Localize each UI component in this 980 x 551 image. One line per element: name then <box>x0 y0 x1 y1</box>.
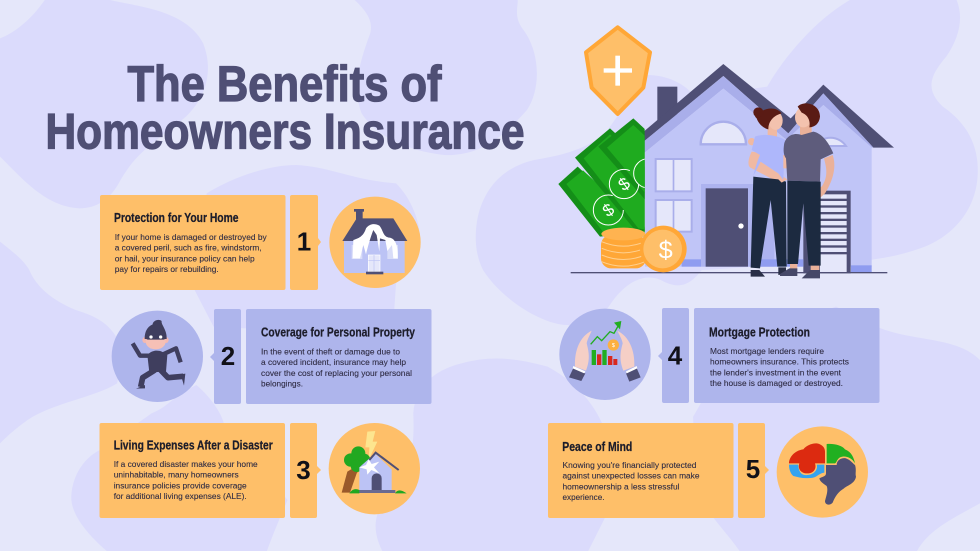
number tab <box>210 309 241 404</box>
panel: text <box>694 308 880 403</box>
body text: the house is damaged or destroyed. <box>710 378 843 388</box>
body text: pay for repairs or rebuilding. <box>115 264 219 274</box>
body text: homeowners insurance. This protects <box>710 357 849 367</box>
scene: shield and house <box>571 27 894 273</box>
title: Homeowners Insurance <box>46 104 524 160</box>
title <box>46 56 524 160</box>
card 3: living expenses after a disaster <box>100 423 420 518</box>
body text: experience. <box>562 492 604 502</box>
heading: Peace of Mind <box>562 440 632 454</box>
body text: a covered peril, such as fire, windstorm, <box>115 243 262 253</box>
figure: woman <box>748 107 787 277</box>
figure: man <box>780 103 834 278</box>
body text: uninhabitable, many homeowners <box>114 470 239 480</box>
icon: shield with plus <box>586 27 650 114</box>
number tab <box>290 195 321 290</box>
body text: In the event of theft or damage due to <box>261 346 400 356</box>
number: 4 <box>668 340 683 370</box>
icon: dollar coin: $ <box>659 237 673 265</box>
body text: belongings. <box>261 378 303 388</box>
heading: Mortgage Protection <box>709 326 810 340</box>
body text: insurance policies provide coverage <box>114 480 247 490</box>
icons: coins <box>601 226 687 272</box>
icon: snow-covered house <box>329 197 421 288</box>
icon: green banknotes: $ <box>599 199 618 221</box>
icon: hands around growth chart: $ <box>612 343 616 349</box>
icon: hands around growth chart <box>559 309 651 400</box>
title: The Benefits of <box>128 56 442 112</box>
body text: Most mortgage lenders require <box>710 346 824 356</box>
body text <box>562 460 700 502</box>
body text: the lender's investment in the event <box>710 367 842 377</box>
body text <box>115 232 267 274</box>
number tab <box>738 423 769 518</box>
body text: If a covered disaster makes your home <box>114 459 258 469</box>
heading: Living Expenses After a Disaster <box>114 438 273 452</box>
body text: If your home is damaged or destroyed by <box>115 232 267 242</box>
panel: text <box>100 195 286 290</box>
icon: burglar <box>112 311 203 402</box>
body text: cover the cost of replacing your personal <box>261 368 412 378</box>
panel: text <box>548 423 734 518</box>
body text: Knowing you're financially protected <box>562 460 697 470</box>
body text: or hail, your insurance policy can help <box>115 253 255 263</box>
icon: coin stack <box>601 228 646 268</box>
panel: text <box>246 309 432 404</box>
figures: couple <box>748 103 834 278</box>
number tab <box>290 423 321 518</box>
number tab <box>658 308 689 403</box>
heading: Coverage for Personal Property <box>261 326 415 340</box>
panel: text <box>100 423 285 518</box>
body text: for additional living expenses (ALE). <box>114 491 247 501</box>
card 1: protection for your home <box>100 195 421 290</box>
number: 2 <box>221 341 235 371</box>
card 5: peace of mind <box>548 423 868 518</box>
heading: Protection for Your Home <box>114 211 239 225</box>
body text <box>114 459 258 501</box>
number: 1 <box>297 226 311 256</box>
illustration: couple in front of insured house <box>558 27 894 278</box>
icon: green banknotes <box>558 118 645 237</box>
icon: storm-damaged house <box>329 423 420 514</box>
icon: brain puzzle <box>777 426 868 518</box>
icon: house <box>571 64 894 273</box>
body text: against unexpected losses can make <box>562 471 700 481</box>
body text <box>710 346 849 388</box>
number: 3 <box>296 455 311 485</box>
body text <box>261 346 412 388</box>
body text: a covered incident, insurance may help <box>261 357 406 367</box>
icon: green banknotes: $ <box>614 173 634 195</box>
number: 5 <box>746 454 760 484</box>
card 2: coverage for personal property <box>112 309 432 404</box>
card 4: mortgage protection <box>559 308 880 403</box>
body text: homeownership a less stressful <box>562 481 680 491</box>
